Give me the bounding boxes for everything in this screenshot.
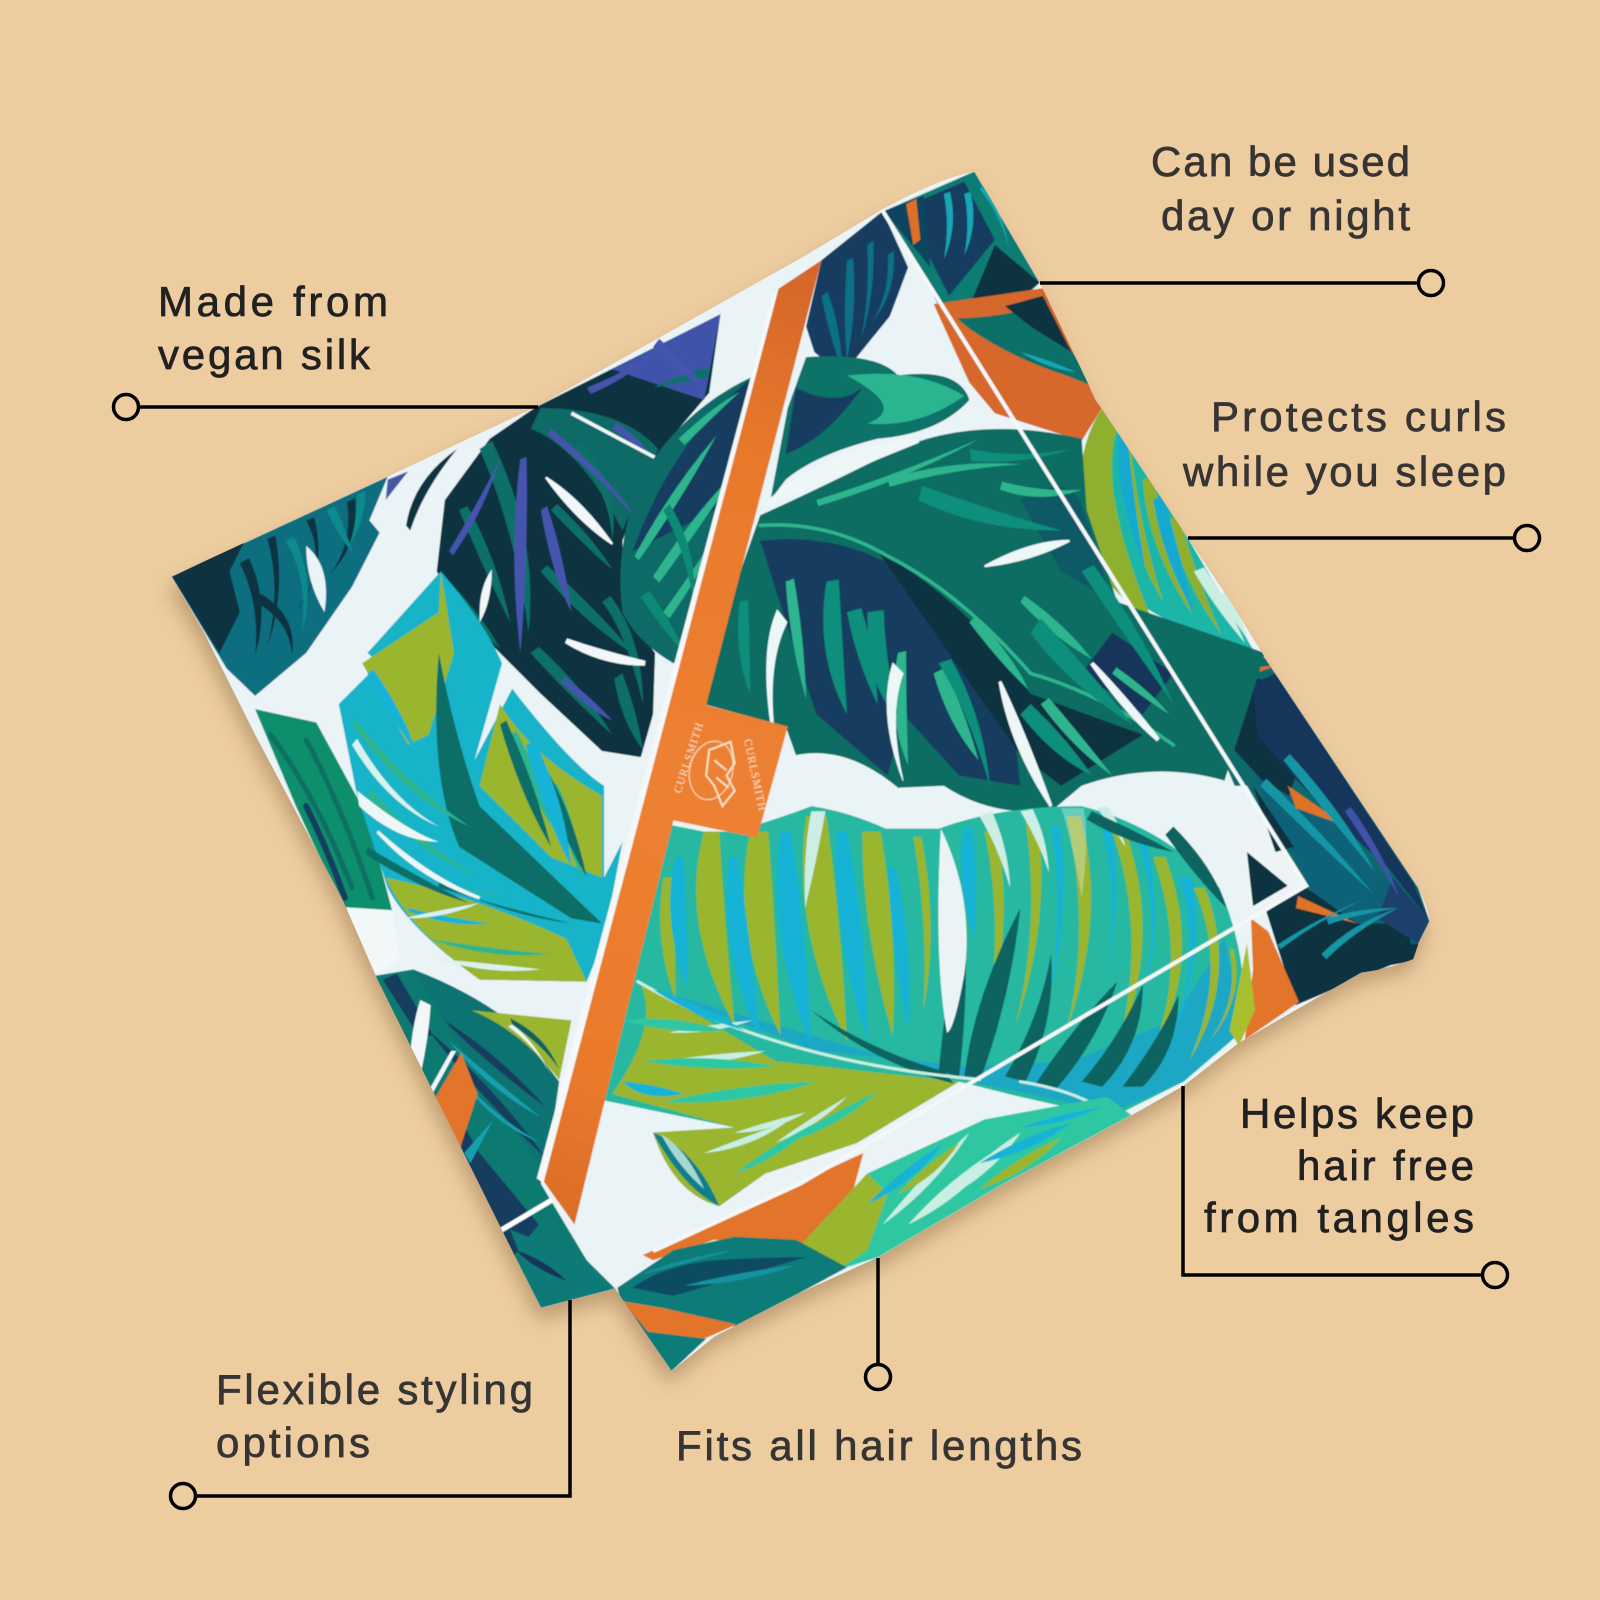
callout: can be used day or night: Can be used (1151, 138, 1410, 185)
big lime and turquoise feather leaf (602, 806, 1244, 1206)
callout: helps keep hair free from tangles (1183, 1086, 1508, 1288)
big dark green leaf (704, 429, 1265, 812)
callout: made from vegan silk (114, 278, 538, 420)
callout: made from vegan silk: Made from (158, 278, 388, 325)
callout: helps keep hair free from tangles: Helps keep (1240, 1090, 1474, 1137)
callout: flexible styling options: options (216, 1419, 370, 1466)
callout: can be used day or night: day or night (1161, 192, 1410, 239)
right lower dark leaf (1227, 656, 1430, 1006)
bottom orange band (643, 918, 1299, 1260)
callout: protects curls while you sleep: while you sleep (1182, 448, 1506, 495)
top centre blue leaf (806, 211, 908, 376)
logo emblem: CURLSMITH (672, 721, 706, 795)
callout: helps keep hair free from tangles: hair free (1297, 1142, 1474, 1189)
orange vertical band with logo patch (537, 260, 821, 1224)
top corner leaf (884, 171, 1040, 316)
white corner panel with dark tips (1246, 786, 1294, 906)
bottom teal leaf and orange stripe (617, 1237, 847, 1371)
right lime leaf (1079, 406, 1255, 653)
scarf product illustration (153, 153, 1449, 1388)
left edge folded leaves (255, 709, 615, 1308)
callout: flexible styling options (170, 1300, 570, 1508)
thin white border line (653, 209, 1306, 1251)
logo emblem (672, 721, 768, 813)
top-left corner leaf (171, 449, 457, 696)
callout: flexible styling options: Flexible styling (216, 1366, 533, 1413)
callout: made from vegan silk: vegan silk (158, 331, 371, 378)
bottom lime leaf (796, 1097, 1132, 1270)
callout: protects curls while you sleep: Protects curls (1211, 393, 1506, 440)
callout: can be used day or night (1040, 138, 1444, 296)
dark navy leaf with purple veins (437, 314, 720, 757)
orange right corner panel (934, 288, 1102, 441)
callout: fits all hair lengths: Fits all hair lengths (676, 1422, 1082, 1469)
callout: fits all hair lengths (676, 1258, 1082, 1469)
callout: protects curls while you sleep (1182, 393, 1540, 550)
logo emblem: CURLSMITH (741, 738, 768, 813)
left lime leaf (339, 571, 622, 982)
teal leaf behind the band (620, 376, 755, 663)
teal mid-top leaf over white (770, 356, 969, 500)
infographic canvas (112, 145, 1542, 1510)
callout: helps keep hair free from tangles: from tangles (1204, 1194, 1474, 1241)
small lower-left lime leaf (471, 1010, 571, 1080)
